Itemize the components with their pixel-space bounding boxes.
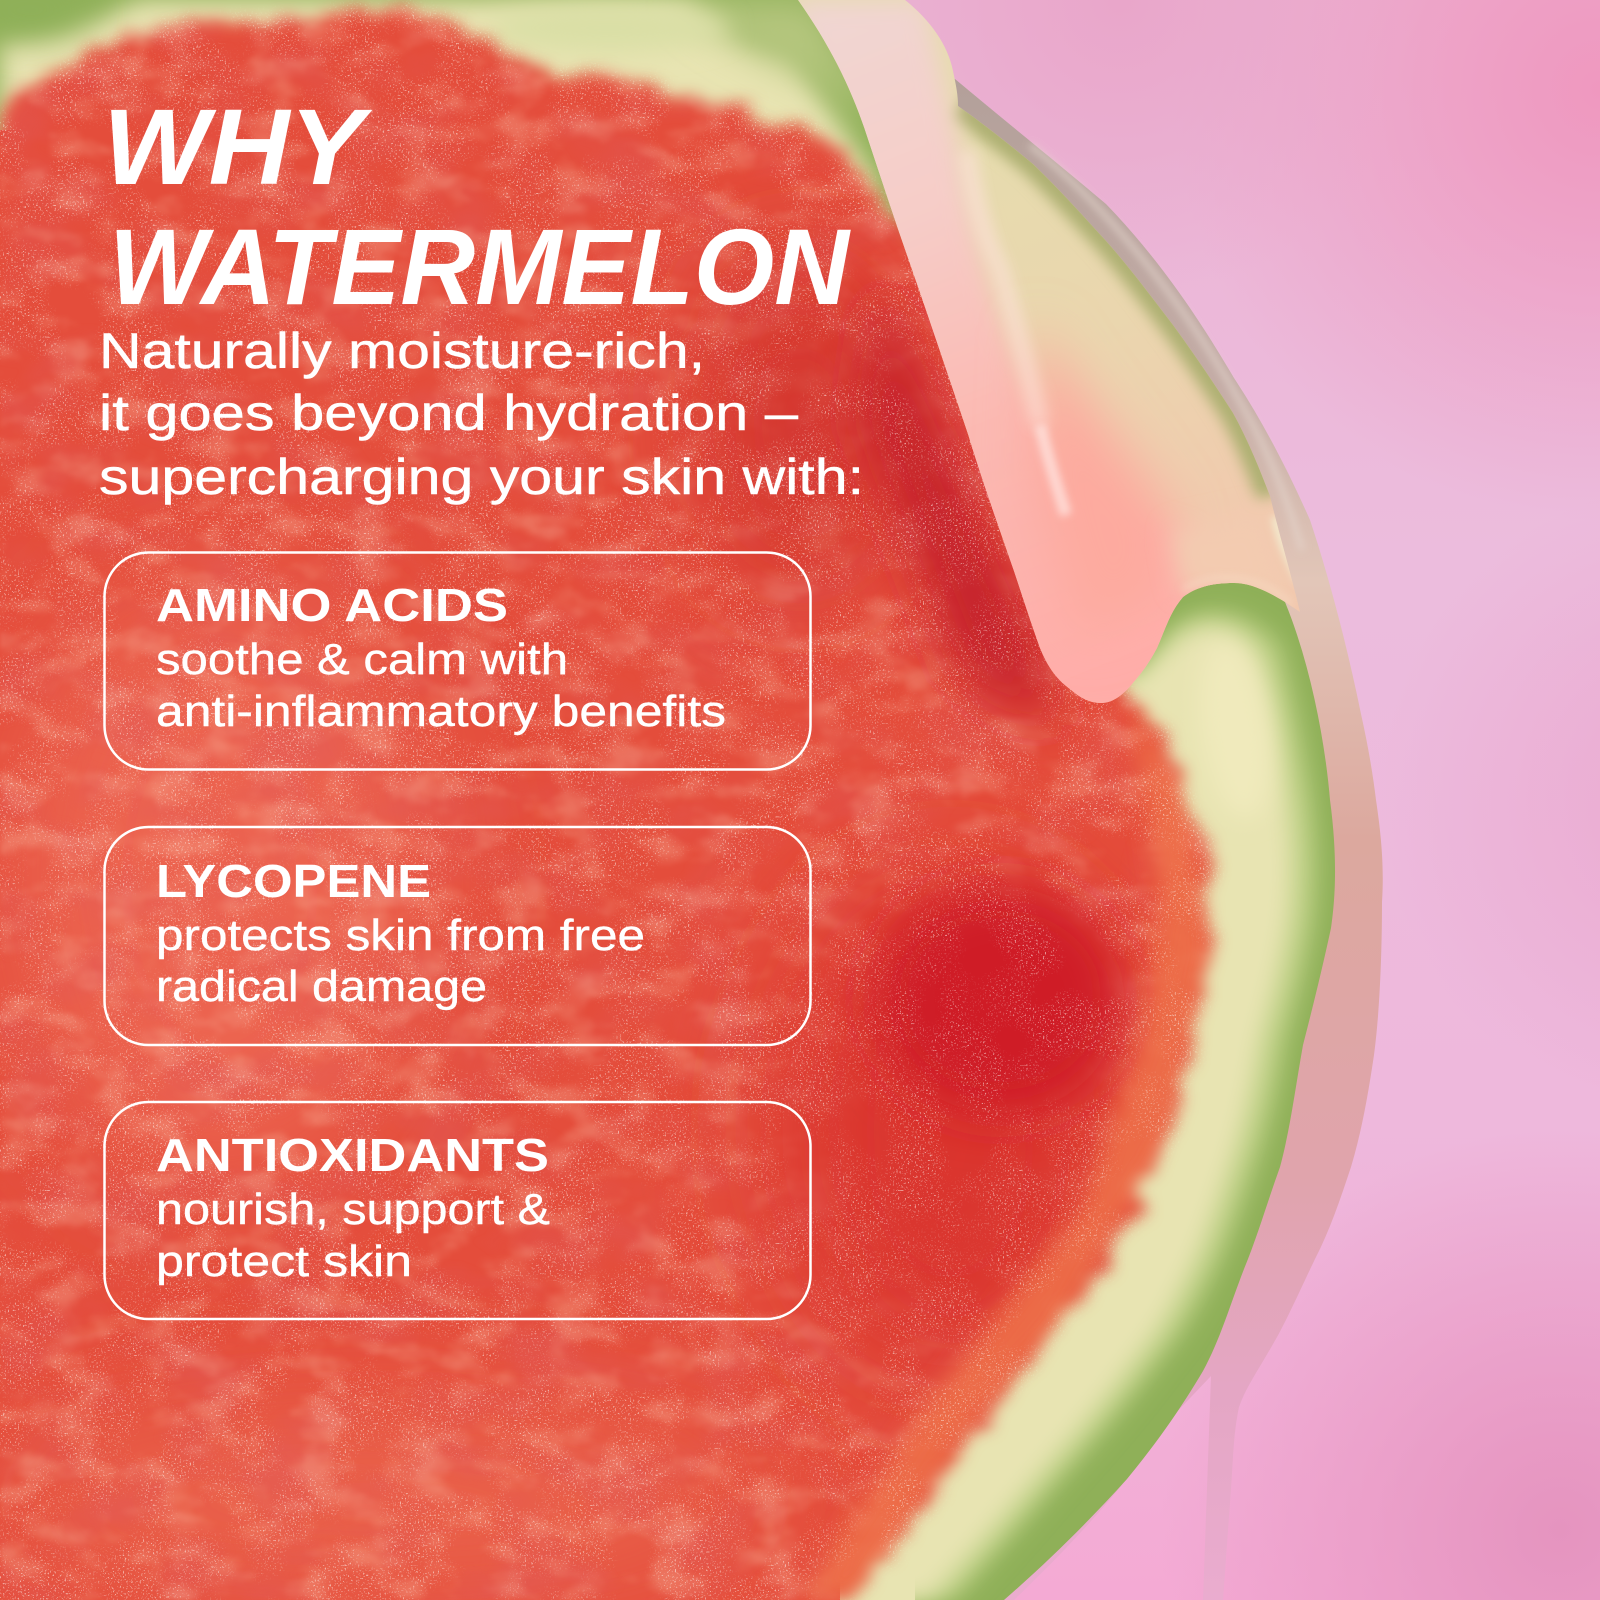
flesh: deep red core — [875, 885, 1125, 1115]
pour: pink glow — [1030, 320, 1175, 640]
panel: antioxidants — [104, 1102, 810, 1319]
pour: green rind fringe — [958, 106, 1270, 496]
intro line 2: it goes beyond hydration – — [99, 385, 798, 441]
flesh: red centre zone — [780, 880, 1120, 1380]
pour: soft pink body — [790, 0, 1240, 720]
text: antioxidants line 1: nourish, support & — [156, 1185, 550, 1234]
title — [103, 86, 851, 327]
heading: lycopene: LYCOPENE — [156, 855, 431, 907]
title line: WATERMELON: WATERMELON — [109, 206, 851, 327]
flesh: orange transition to rind — [800, 700, 1212, 1600]
rind: soft green top left — [0, 0, 90, 38]
rind: yellow-green transition band — [915, 603, 1327, 1600]
pour: peach band above lobe — [1170, 510, 1295, 600]
serum: thick pink pour over pale rind — [790, 0, 1310, 720]
flesh: lighter coral at bottom — [0, 1410, 760, 1590]
pour: cream rind base — [790, 0, 1310, 720]
panel: lycopene — [104, 827, 810, 1045]
flesh: juice sparkle — [0, 0, 1250, 1600]
rind: greenish tint on top band — [490, 4, 730, 52]
text: antioxidants line 2: protect skin — [156, 1237, 412, 1286]
panel: amino acids — [104, 552, 810, 770]
flesh: dark streak beside serum — [860, 280, 1060, 730]
text: amino acids line 2: anti-inflammatory benefits — [156, 687, 726, 736]
text: lycopene line 2: radical damage — [156, 962, 487, 1011]
pour: lobe rim line — [1183, 578, 1292, 605]
rind: soft green top right — [709, 0, 860, 116]
intro line 3: supercharging your skin with: — [99, 449, 864, 505]
heading: antioxidants: ANTIOXIDANTS — [156, 1129, 549, 1181]
intro line 1: Naturally moisture-rich, — [99, 323, 705, 379]
pour: glossy streak — [967, 151, 1040, 425]
rind: cream highlight on lobe — [1211, 644, 1278, 802]
text: lycopene line 1: protects skin from free — [156, 911, 645, 960]
heading: amino acids: AMINO ACIDS — [156, 579, 508, 631]
flesh: lighter coral on left — [10, 580, 430, 1180]
title line: WHY: WHY — [103, 86, 373, 207]
flesh: mottled dark texture — [0, 0, 1250, 1600]
text: amino acids line 1: soothe & calm with — [156, 635, 568, 684]
serum coating on melon edge and drip — [800, 79, 1383, 1600]
pour: cream seam on rim — [1276, 516, 1300, 580]
flesh: mottled light texture — [0, 0, 1250, 1600]
rind: pale patch at bottom edge — [840, 1588, 915, 1600]
pour: glossy highlight — [1040, 425, 1066, 515]
intro paragraph — [99, 323, 864, 505]
flesh: upper right darker zone — [710, 250, 890, 590]
